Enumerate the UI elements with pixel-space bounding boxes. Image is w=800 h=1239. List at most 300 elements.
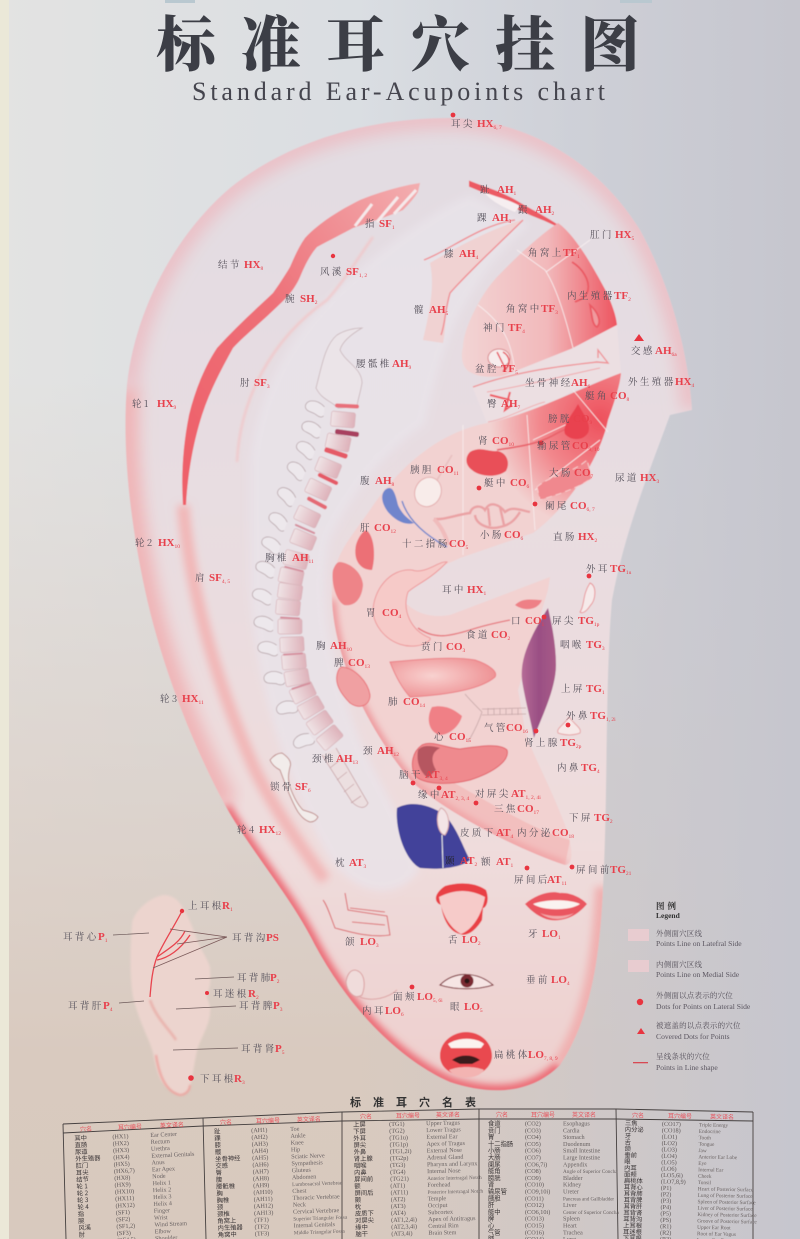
column 4 english: Appendix — [563, 1161, 588, 1168]
concha region — [332, 372, 622, 866]
point: 胰胆: 胰胆 — [410, 462, 434, 476]
column 1 codes: (HX12) — [115, 1202, 135, 1210]
point: 屏间前: 21 — [626, 871, 632, 877]
legend: line shape — [633, 1051, 718, 1072]
column 4 — [488, 1110, 619, 1239]
column 5 codes: (LO1) — [662, 1134, 677, 1141]
column 2 english: Neck — [293, 1201, 307, 1209]
column 1 names: 耳中 — [74, 1133, 87, 1142]
point: 上耳根: R — [222, 900, 231, 912]
column 3 codes: (TG1) — [389, 1121, 405, 1128]
point: 颈: AH — [377, 745, 394, 757]
column 3 names: 肾上腺 — [354, 1154, 373, 1163]
point: 口: 1 — [542, 622, 544, 628]
open mouth tonsil — [440, 1032, 492, 1078]
column 3 codes: (AT2) — [391, 1196, 406, 1203]
point: 输尿管: CO — [572, 440, 589, 452]
column 3 names: 额 — [354, 1181, 361, 1190]
column 3 english: Subcortex — [428, 1209, 454, 1216]
point: 内鼻: 内鼻 — [557, 760, 581, 774]
column 4 codes: (CO2) — [525, 1120, 541, 1128]
column 2 codes: (AH8) — [253, 1175, 269, 1183]
point: 三焦: 17 — [534, 810, 539, 816]
column 5 — [623, 1110, 759, 1239]
point: 食道: CO — [491, 629, 508, 641]
column 1 header: 英文译名 — [160, 1120, 184, 1130]
point: 耳背心: 1 — [105, 938, 108, 944]
point: 气管: CO — [506, 722, 523, 734]
column 4 codes: (CO9,10i) — [525, 1188, 550, 1196]
column 2 codes: (AH9) — [253, 1182, 269, 1189]
column 3 english: External Nose — [427, 1147, 462, 1155]
column 4 english: Center of Superior Concha — [563, 1209, 619, 1216]
legend: lateral dots: 外侧面以点表示的穴位 — [656, 990, 733, 1001]
point: 跟: 2 — [552, 211, 554, 217]
point: 胸椎: 胸椎 — [265, 550, 289, 564]
point: 肩: 肩 — [195, 570, 207, 584]
point: 外生殖器: HX — [675, 376, 692, 388]
column 1 english: Anus — [151, 1159, 165, 1167]
point: 颈椎: 13 — [352, 760, 358, 766]
column 3 codes: (AT3,4i) — [391, 1230, 413, 1238]
column 4 english: Liver — [563, 1202, 576, 1209]
column 5 names: 颌 — [624, 1144, 632, 1153]
column 4 names: 阑尾 — [488, 1159, 501, 1168]
point: 屏间后 — [514, 866, 567, 887]
column 3 english: Occiput — [428, 1202, 448, 1209]
stomach and esophagus — [373, 562, 510, 646]
column 2 english: Superior Triangular Fossa — [293, 1215, 348, 1223]
column 5 names: 内分泌 — [625, 1125, 645, 1134]
gallbladder — [382, 488, 447, 547]
column 2 english: Hip — [291, 1146, 300, 1154]
point: 上耳根 — [180, 898, 233, 913]
column 3 english: Temple — [428, 1195, 446, 1203]
point: 十二指肠: 5 — [466, 545, 468, 551]
column 3 names: 缘中 — [355, 1222, 368, 1231]
column 4 codes: (CO11) — [525, 1195, 544, 1202]
column 1 codes: (HX5) — [113, 1161, 130, 1168]
point: 指: 指 — [365, 216, 377, 230]
column 4 english: Spleen — [563, 1216, 580, 1223]
point: 角窝中: TF — [541, 303, 555, 315]
column 4 codes: (CO12) — [525, 1202, 544, 1209]
table title: 标准耳穴名表 — [350, 1094, 488, 1110]
column 1 header: 耳穴编号 — [118, 1121, 142, 1132]
column 3 english: Adrenal Gland — [427, 1154, 464, 1161]
column 1 codes: (HX6,7) — [114, 1167, 135, 1175]
lobe edge — [156, 1055, 190, 1095]
point: 肝: 12 — [390, 529, 396, 535]
point: 颈: 12 — [394, 752, 399, 758]
table rules — [63, 1109, 753, 1239]
point: 角窝上: 角窝上 — [528, 245, 564, 259]
point: 屏间前 — [570, 862, 632, 877]
column 2 codes: (AH2) — [251, 1134, 268, 1141]
column 5 codes: (LO5) — [661, 1159, 677, 1166]
column 4 codes: (CO6,10i) — [525, 1209, 550, 1216]
helix red stripe — [182, 183, 420, 505]
point: 咽喉: 咽喉 — [560, 637, 584, 651]
heart — [429, 706, 462, 735]
legend: lateral line — [628, 928, 742, 948]
column 4 english: Bladder — [563, 1175, 583, 1182]
cervical vertebrae — [322, 748, 368, 807]
column 1 codes: (SF3) — [117, 1230, 131, 1237]
point: 屏尖: TG — [578, 615, 594, 627]
column 4 names: 胰胆 — [488, 1193, 501, 1202]
ear point labels — [132, 113, 694, 1062]
point: 臀: 臀 — [487, 396, 499, 410]
point: 耳背脾: 耳背脾 — [239, 998, 275, 1012]
legend: line shape: 呈线条状的穴位 — [656, 1051, 710, 1062]
column 1 — [74, 1119, 199, 1239]
column 4 names: 肾 — [488, 1180, 495, 1189]
acupoint name table — [63, 1109, 759, 1239]
column 4 english: Stomach — [563, 1134, 586, 1141]
column 2 codes: (AH13) — [254, 1209, 273, 1217]
column 4 header: 穴名 — [496, 1110, 508, 1119]
legend heading: Legend — [656, 911, 681, 920]
clavicle bone — [270, 753, 318, 822]
point: 脑干: 脑干 — [399, 767, 423, 781]
point: 皮质下: 皮质下 — [460, 825, 496, 839]
point: 肾上腺: TG — [560, 737, 576, 749]
point: 额: 1 — [510, 863, 513, 869]
point: 小肠: 小肠 — [480, 527, 504, 541]
column 1 names: 轮 4 — [77, 1202, 89, 1211]
column 2 english: Sympathesis — [291, 1159, 323, 1167]
point: 耳背肝: 耳背肝 — [68, 998, 104, 1012]
small ear silhouette — [131, 895, 210, 1095]
point: 肾: 10 — [508, 442, 514, 448]
point: 跟: AH — [535, 204, 552, 216]
triangular fossa — [462, 223, 617, 377]
point: 阑尾: CO — [570, 500, 587, 512]
column 2 english: Chest — [292, 1188, 307, 1195]
column 3 names: 内鼻 — [354, 1167, 367, 1177]
point: 屏间后: 屏间后 — [514, 872, 550, 886]
point: 面颊: 面颊 — [393, 989, 417, 1003]
point: 腕: SH — [300, 293, 315, 305]
column 5 names: 耳背肾 — [623, 1208, 643, 1217]
column 3 header: 穴名 — [360, 1111, 372, 1121]
point: 扁桃体: LO — [528, 1049, 544, 1061]
column 2 codes: (AH4) — [252, 1147, 268, 1155]
point: 对屏尖: AT — [511, 788, 526, 800]
column 5 english: Internal Ear — [698, 1167, 724, 1174]
column 2 codes: (AH7) — [253, 1168, 269, 1176]
large intestine — [537, 460, 592, 500]
column 2 english: Cervical Vertebrae — [293, 1207, 340, 1216]
point: 舌: 舌 — [448, 932, 460, 946]
point: 艇中: 6 — [526, 484, 530, 490]
column 4 names: 十二指肠 — [488, 1139, 513, 1148]
column 4 codes: (CO13) — [525, 1216, 544, 1223]
point: 耳背沟: PS — [266, 932, 279, 944]
point: 内分泌: CO — [552, 827, 569, 839]
column 2 names: 腹 — [216, 1175, 223, 1184]
point: 外生殖器: 4 — [692, 383, 694, 389]
point: 交感: 6a — [672, 352, 677, 358]
column 3 names: 皮质下 — [355, 1208, 374, 1218]
superior antihelix crus — [423, 182, 558, 343]
point: 艇角: 艇角 — [585, 388, 609, 402]
point: 外耳 — [586, 561, 632, 578]
column 5 codes: (P3) — [661, 1198, 671, 1205]
point: 十二指肠: 十二指肠 — [402, 536, 450, 550]
column 2 codes: (TF3) — [255, 1230, 269, 1238]
column 1 english: Ear Apex — [152, 1165, 176, 1174]
column 5 names: 舌 — [625, 1137, 631, 1146]
trachea — [465, 694, 526, 742]
column 5 english: Tooth — [699, 1135, 711, 1141]
point: 输尿管: 输尿管 — [537, 438, 573, 452]
column 4 header: 耳穴编号 — [531, 1110, 555, 1119]
column 2 names: 交感 — [215, 1161, 229, 1170]
column 5 english: Tonsil — [698, 1180, 712, 1186]
column 1 english: External Genitals — [151, 1151, 195, 1160]
column 5 codes: (P1) — [661, 1185, 672, 1192]
legend: lateral dots: Dots for Points on Lateral Side — [656, 1002, 751, 1011]
brain stem fold — [417, 746, 440, 778]
point: 脑干 — [399, 767, 448, 785]
point: 轮3: 轮3 — [160, 691, 180, 705]
column 2 codes: (AH12) — [254, 1203, 273, 1210]
point: 内生殖器: 2 — [628, 297, 631, 303]
column 5 english: Cheek — [698, 1174, 712, 1180]
column 4 codes: (CO9) — [525, 1175, 541, 1182]
point: 肝: 肝 — [360, 520, 372, 534]
point: 颌: LO — [360, 936, 376, 948]
point: 内分泌: 18 — [568, 834, 574, 840]
column 4 codes: (CO7) — [525, 1154, 541, 1162]
point: 踝: AH — [492, 212, 509, 224]
point: 踝: 踝 — [477, 210, 489, 224]
column 4 codes: (CO6) — [525, 1148, 541, 1155]
column 4 english: Pancreas and Gallbladder — [563, 1197, 614, 1202]
tongue — [436, 883, 488, 935]
column 1 codes: (SF1) — [116, 1209, 130, 1217]
point: 外耳: 1u — [626, 570, 632, 576]
column 2 english: Thoracic Vertebrae — [292, 1193, 340, 1202]
column 4 names: 小肠 — [488, 1146, 501, 1155]
spleen — [337, 667, 370, 706]
column 5 english: Upper Ear Root — [697, 1225, 731, 1231]
point: 锁骨: 6 — [308, 788, 311, 794]
column 3 english: Brain Stem — [428, 1229, 457, 1237]
point: 内耳: 内耳 — [362, 1003, 386, 1017]
scapha line — [237, 237, 373, 462]
column 3 codes: (TG2p) — [390, 1155, 408, 1162]
column 4 codes: (CO10) — [525, 1182, 544, 1189]
point: 口 — [511, 613, 546, 628]
point: 膝: AH — [459, 248, 476, 260]
column 1 names: 轮 1 — [76, 1181, 88, 1191]
legend: covered dots — [637, 1020, 741, 1041]
point: 外鼻: 外鼻 — [566, 708, 590, 722]
point: 耳迷根 — [205, 986, 259, 1001]
point: 艇角: 8 — [626, 397, 630, 403]
column 1 english: Finger — [154, 1207, 170, 1215]
point: 脾: 脾 — [334, 655, 346, 669]
column 3 names: 上屏 — [353, 1120, 366, 1129]
column 5 english: Spleen of Posterior Surface — [698, 1198, 756, 1206]
column 4 english: Esophagus — [563, 1120, 590, 1128]
point: 咽喉: 3 — [602, 646, 605, 652]
finger marks — [355, 190, 416, 226]
column 5 codes: (LO3) — [661, 1146, 677, 1154]
point: 外生殖器: 外生殖器 — [628, 374, 676, 388]
point: 小肠: CO — [504, 529, 521, 541]
point: 贲门: 贲门 — [421, 639, 445, 653]
point: 下屏: TG — [594, 812, 610, 824]
column 1 codes: (HX11) — [115, 1195, 134, 1203]
point: 舌: 2 — [478, 941, 481, 947]
column 5 codes: (LO5,6i) — [661, 1172, 683, 1179]
column 3 names: 咽喉 — [354, 1161, 367, 1170]
point: 颈: 颈 — [363, 743, 375, 757]
eye — [440, 974, 493, 989]
column 4 names: 艇中 — [488, 1207, 501, 1216]
point: 三焦: 三焦 — [494, 801, 518, 815]
point: 腹: AH — [375, 475, 392, 487]
column 3 codes: (AT1,2,4i) — [391, 1216, 417, 1224]
column 3 english: Apex of Tragus — [426, 1140, 466, 1148]
column 1 codes: (SF1,2) — [116, 1223, 135, 1230]
column 3 header: 英文译名 — [436, 1110, 460, 1119]
point: 枕: 枕 — [335, 855, 347, 869]
point: 艇中: 艇中 — [484, 475, 508, 489]
column 5 names: 扁桃体 — [624, 1176, 644, 1185]
leader lines to groove — [153, 929, 227, 968]
point: 外耳: 外耳 — [586, 561, 610, 575]
point: 耳迷根: 耳迷根 — [213, 986, 249, 1000]
point: 轮2: 轮2 — [135, 535, 155, 549]
point: 颞: 颞 — [445, 853, 457, 867]
point: 肾上腺: 2p — [576, 744, 582, 750]
point: 缘中: AT — [441, 789, 456, 801]
point: 眼: LO — [464, 1001, 480, 1013]
point: 交感: AH — [655, 345, 672, 357]
column 2 names: 角窝上 — [217, 1216, 236, 1225]
column 3 codes: (AT1) — [390, 1182, 405, 1190]
column 2 english: Ankle — [290, 1132, 306, 1140]
column 1 names: 轮 3 — [77, 1195, 89, 1205]
column 4 english: Angle of Superior Concha — [563, 1168, 618, 1175]
column 5 english: Liver of Posterior Surface — [697, 1205, 753, 1213]
point: 腰骶椎: 腰骶椎 — [356, 356, 392, 370]
column 2 names: 颈 — [217, 1202, 224, 1211]
internal genitals sketch — [572, 262, 599, 327]
column 4 names: 肝 — [488, 1200, 495, 1209]
column 5 codes: (P2) — [661, 1191, 671, 1198]
point: 腰骶椎: AH — [392, 358, 409, 370]
point: 耳背脾: 3 — [280, 1007, 283, 1013]
brain stem lobe — [412, 743, 507, 783]
point: 心: 心 — [434, 729, 446, 743]
point: 外鼻: TG — [590, 710, 606, 722]
point: 指: 1 — [392, 225, 395, 231]
column 3 english: Pharynx and Larynx — [427, 1160, 478, 1168]
column 5 codes: (LO4) — [661, 1153, 677, 1160]
point: 皮质下: AT — [496, 827, 511, 839]
point: 口: 口 — [511, 613, 523, 627]
column 1 codes: (HX3) — [113, 1147, 129, 1155]
point: 耳背肾: P — [275, 1043, 282, 1055]
column 2 names: 臀 — [216, 1168, 222, 1177]
back of ear diagram — [63, 895, 285, 1095]
point: 耳背肾: 耳背肾 — [241, 1041, 277, 1055]
point: 输尿管: 9, 10 — [588, 447, 600, 453]
leg sciatic band — [473, 325, 621, 423]
point: 下耳根: R — [234, 1073, 243, 1085]
tragus mauve — [522, 608, 556, 738]
point: 内分泌: 内分泌 — [517, 825, 553, 839]
point: 下屏: 2 — [610, 819, 613, 825]
column 1 english: Urethra — [151, 1145, 170, 1153]
point: 胸: 10 — [346, 647, 352, 653]
spine — [251, 328, 368, 807]
point: 面颊 — [393, 985, 443, 1004]
point: 坐骨神经: 6 — [588, 384, 590, 390]
column 3 english: Upper Tragus — [426, 1120, 461, 1127]
column 3 english: Central Rim — [428, 1222, 459, 1230]
point: 胰胆: 11 — [454, 471, 459, 477]
column 5 names: 耳背肺 — [624, 1189, 643, 1198]
point: 盆腔: TF — [501, 363, 515, 375]
column 1 codes: (HX4) — [113, 1154, 130, 1161]
legend — [628, 900, 751, 1072]
point: 耳迷根: R — [248, 988, 257, 1000]
point: 胸: AH — [330, 640, 347, 652]
legend: medial line — [628, 959, 740, 979]
point: 内耳: 6 — [401, 1012, 404, 1018]
point: 风溪: 风溪 — [320, 264, 344, 278]
point: 腰骶椎: 9 — [408, 365, 412, 371]
point: 大肠: 7 — [590, 474, 594, 480]
legend heading — [656, 900, 681, 920]
point: 神门: TF — [508, 322, 522, 334]
point: 内生殖器: 内生殖器 — [567, 288, 615, 302]
point: 颞: 2 — [474, 862, 477, 868]
point: 对屏尖: 1, 2, 4i — [525, 795, 541, 801]
column 5 header: 穴名 — [632, 1110, 644, 1119]
column 4 names: 膀胱 — [488, 1173, 501, 1182]
column 5 names: 垂前 — [624, 1150, 637, 1159]
column 3 english: Apex of Antitragus — [428, 1215, 476, 1223]
kidney — [466, 449, 508, 476]
column 5 codes: (R2) — [660, 1230, 671, 1237]
red groove lines — [150, 911, 190, 997]
point: 眼: 眼 — [450, 999, 462, 1013]
point: 扁桃体: 7, 8, 9 — [544, 1056, 558, 1062]
point: 垂前: LO — [551, 974, 567, 986]
column 3 codes: (AT11) — [390, 1189, 408, 1196]
column 3 names: 外鼻 — [354, 1147, 366, 1156]
column 2 english: Toe — [290, 1126, 300, 1133]
point: 轮4: HX — [259, 824, 276, 836]
column 1 english: Wind Stream — [154, 1220, 187, 1229]
legend: line shape: Points in Line shape — [656, 1063, 718, 1072]
point: 膀胱: 9 — [590, 420, 592, 426]
column 3 names: 脑干 — [355, 1229, 368, 1238]
point: 耳中: 1 — [484, 591, 486, 597]
point: 膝: 4 — [476, 255, 478, 261]
leader lines — [113, 933, 238, 1050]
point: 指: SF — [379, 218, 392, 230]
column 3 header: 耳穴编号 — [396, 1110, 420, 1120]
